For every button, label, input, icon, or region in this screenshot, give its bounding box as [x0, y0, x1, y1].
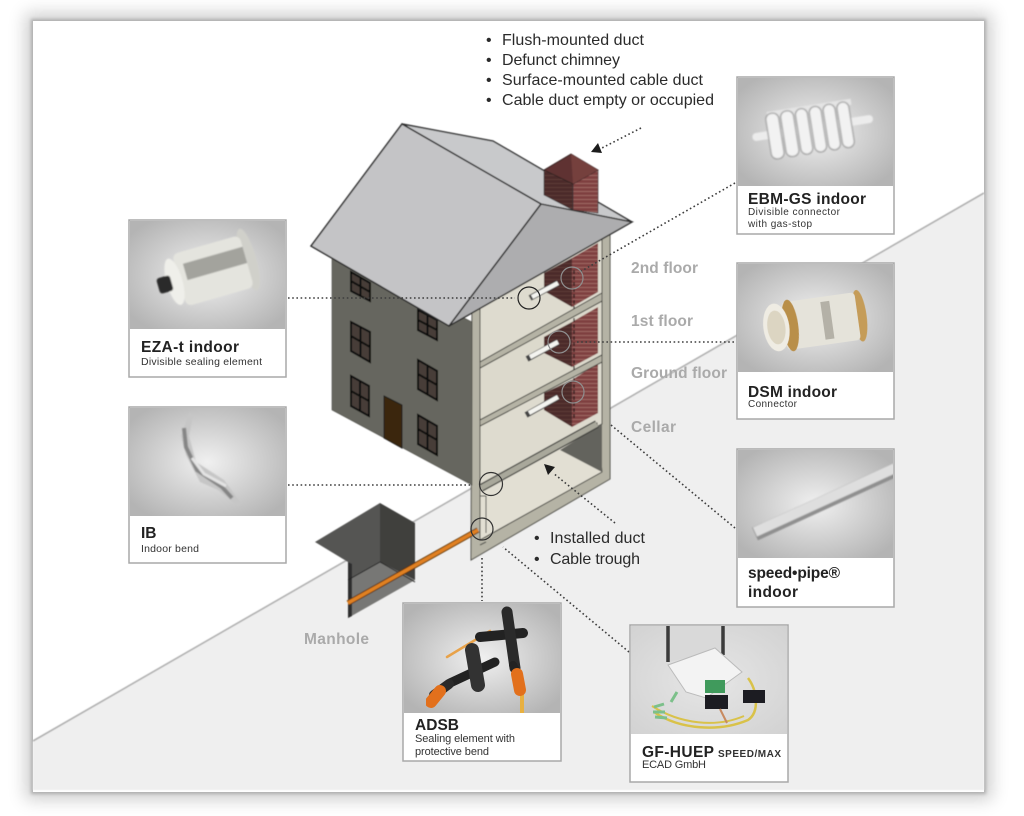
floor labels [631, 260, 727, 436]
card: DSM indoor: Connector [748, 399, 798, 410]
top bullet list: • [486, 92, 492, 109]
top bullet list: • [486, 32, 492, 49]
card: ADSB: protective bend [415, 746, 489, 758]
card: GF-HUEP: ECAD GmbH [642, 759, 706, 771]
card: ADSB: Sealing element with [415, 733, 515, 745]
product: DSM [760, 289, 870, 355]
card: ADSB: ADSB [415, 717, 459, 734]
leader lines [288, 183, 736, 652]
floor labels: 1st floor [631, 313, 693, 330]
first floor room [480, 301, 602, 420]
roof back slope [402, 124, 632, 222]
floor labels: 2nd floor [631, 260, 698, 277]
door [384, 396, 402, 448]
duct first floor [527, 342, 558, 359]
card: speed-pipe indoor [737, 449, 895, 607]
slab lower [480, 355, 602, 426]
orange duct [348, 530, 478, 603]
product: EZA-t [149, 227, 265, 316]
card: EZA-t indoor: Divisible sealing element [141, 356, 262, 368]
card: ADSB [403, 603, 561, 761]
riser dashes [573, 270, 575, 420]
top bullet list: Flush-mounted duct [502, 32, 645, 49]
ground area [33, 193, 984, 790]
top bullet list: Cable duct empty or occupied [502, 92, 714, 109]
lower bullet list [534, 530, 646, 568]
floor labels: Cellar [631, 419, 676, 436]
arrow: to cellar duct [544, 464, 615, 523]
card: speed-pipe indoor: indoor [748, 584, 798, 601]
product: indoor bend [181, 412, 242, 506]
card: EBM-GS indoor: Divisible connector [748, 207, 841, 218]
card: IB [129, 407, 286, 563]
section wall frame [471, 215, 610, 560]
lower bullet list: Installed duct [550, 530, 646, 547]
card: EBM-GS indoor [737, 77, 894, 234]
product: EBM-GS [752, 98, 874, 160]
card: DSM indoor [737, 263, 894, 419]
card: speed-pipe indoor: speed•pipe® [748, 565, 841, 582]
marker circles [471, 267, 584, 540]
product: ADSB [431, 612, 523, 713]
duct second floor [530, 283, 558, 298]
card: IB: IB [141, 525, 156, 542]
cellar back wall [560, 424, 602, 472]
card: DSM indoor: DSM indoor [748, 384, 837, 401]
cellar room [480, 423, 602, 540]
top bullet list: Defunct chimney [502, 52, 620, 69]
card: EBM-GS indoor: with gas-stop [747, 219, 812, 230]
brick stack second floor [544, 243, 598, 307]
top bullet list: • [486, 72, 492, 89]
card: EZA-t indoor: EZA-t indoor [141, 339, 239, 356]
top bullet list: • [486, 52, 492, 69]
card: GF-HUEP [630, 625, 788, 782]
house side wall [332, 250, 472, 485]
lower bullet list: Cable trough [550, 551, 640, 568]
manhole label: Manhole [304, 631, 369, 648]
arrow: to chimney [591, 128, 641, 153]
product: speed-pipe [755, 468, 895, 534]
card: IB: Indoor bend [141, 543, 199, 555]
brick stack ground floor [544, 363, 598, 427]
ground floor room [480, 362, 602, 490]
brick stack first floor [544, 307, 598, 367]
card: EZA-t indoor [129, 220, 286, 377]
floor labels: Ground floor [631, 365, 727, 382]
duct tray [481, 424, 597, 488]
slab upper [480, 293, 602, 368]
manhole [315, 503, 415, 618]
lower bullet list: • [534, 530, 540, 547]
product: GF-HUEP [652, 626, 765, 728]
second floor room [480, 225, 602, 362]
riser outline [480, 496, 486, 545]
lower bullet list: • [534, 551, 540, 568]
windows [351, 272, 437, 455]
card: EBM-GS indoor: EBM-GS indoor [748, 191, 866, 208]
top bullet list [486, 32, 714, 109]
duct ground floor [526, 397, 558, 415]
card: GF-HUEP: SPEED/MAX [718, 749, 781, 760]
roof front slope [311, 124, 541, 326]
roof right slope [449, 204, 632, 326]
house [311, 124, 632, 618]
chimney [544, 154, 598, 213]
top bullet list: Surface-mounted cable duct [502, 72, 704, 89]
card: GF-HUEP: GF-HUEP [642, 744, 714, 761]
